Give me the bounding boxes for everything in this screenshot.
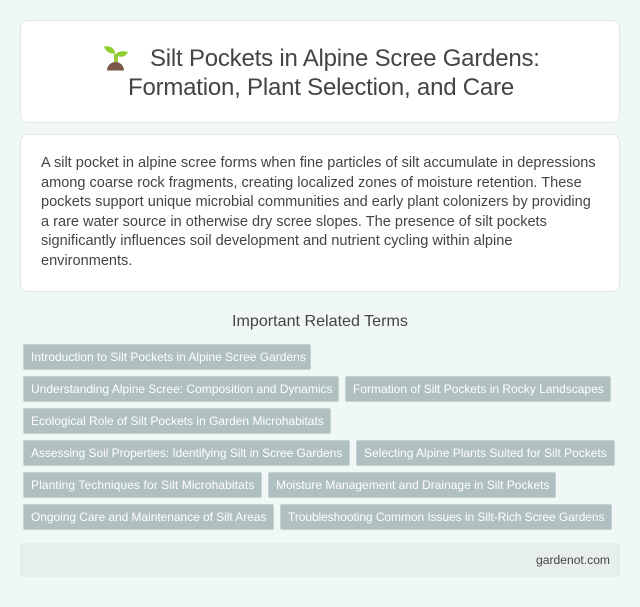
title: Formation, Plant Selection, and Care bbox=[128, 74, 514, 101]
description text: pockets support unique microbial communities and early plant colonizers by providing bbox=[41, 194, 591, 210]
tag: Planting Techniques for Silt Microhabitats bbox=[31, 478, 254, 492]
tag: Troubleshooting Common Issues in Silt-Rich Scree Gardens bbox=[288, 510, 604, 524]
tag: Ongoing Care and Maintenance of Silt Areas bbox=[31, 510, 266, 524]
description text: A silt pocket in alpine scree forms when fine particles of silt accumulate in depressions bbox=[41, 155, 596, 171]
footer bbox=[20, 543, 620, 577]
tag: Formation of Silt Pockets in Rocky Landscapes bbox=[353, 382, 604, 396]
tag bbox=[280, 504, 612, 530]
title: Silt Pockets in Alpine Scree Gardens: bbox=[150, 45, 540, 72]
description text: environments. bbox=[41, 252, 132, 268]
icon: seedling bbox=[104, 46, 128, 70]
tag: Understanding Alpine Scree: Composition and Dynamics bbox=[31, 382, 332, 396]
description text: a rare water source in otherwise dry scree slopes. The presence of silt pockets bbox=[41, 214, 547, 230]
tag list bbox=[23, 344, 615, 530]
tag: Assessing Soil Properties: Identifying Silt in Scree Gardens bbox=[31, 446, 342, 460]
tag: Ecological Role of Silt Pockets in Garden Microhabitats bbox=[31, 414, 324, 428]
description text bbox=[41, 155, 596, 268]
panel: description bbox=[20, 134, 620, 292]
description text: significantly influences soil development and nutrient cycling within alpine bbox=[41, 233, 512, 249]
title bbox=[128, 45, 540, 101]
tag: Selecting Alpine Plants Suited for Silt Pockets bbox=[364, 446, 607, 460]
tag bbox=[268, 472, 556, 498]
tag bbox=[23, 408, 331, 434]
tag bbox=[23, 504, 274, 530]
heading: related terms: Important Related Terms bbox=[232, 312, 408, 330]
tag bbox=[23, 376, 339, 402]
panel: header bbox=[20, 20, 620, 123]
tag bbox=[356, 440, 615, 466]
tag: Introduction to Silt Pockets in Alpine Scree Gardens bbox=[31, 350, 306, 364]
footer source text: gardenot.com bbox=[536, 553, 610, 567]
description text: among coarse rock fragments, creating localized zones of moisture retention. These bbox=[41, 174, 582, 190]
tag bbox=[23, 472, 262, 498]
tag bbox=[345, 376, 611, 402]
tag bbox=[23, 440, 350, 466]
tag: Moisture Management and Drainage in Silt Pockets bbox=[276, 478, 549, 492]
tag bbox=[23, 344, 311, 370]
